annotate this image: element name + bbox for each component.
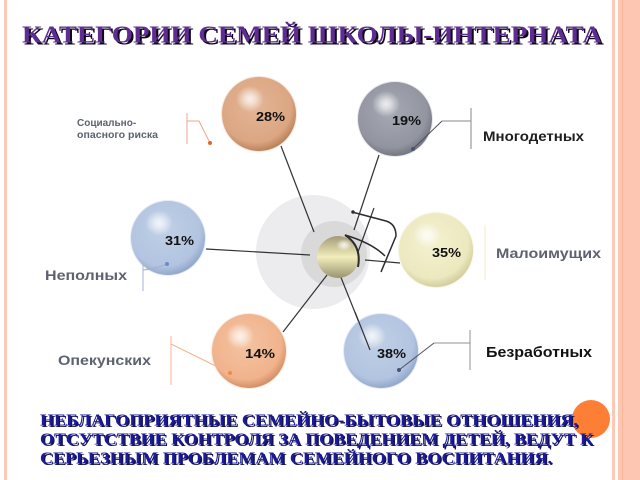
line into 38% sphere [355,312,370,350]
sphere: 38% [343,313,419,389]
callout: социально-опасного риска: опасного риска [77,130,158,141]
sphere: 28%: 28% [256,109,285,124]
conclusion text: НЕБЛАГОПРИЯТНЫЕ СЕМЕЙНО-БЫТОВЫЕ ОТНОШЕНИЯ, [42,412,580,431]
callout: опекунских: Опекунских [58,352,151,368]
callout: неполных: Неполных [45,267,127,283]
sphere: 31% [130,200,206,276]
sphere: 14% [211,313,287,389]
hand-drawn arrows [345,211,396,272]
left border stripe [4,0,7,480]
callout: многодетных: Многодетных [483,128,584,144]
diagram backdrop: grey circles [256,195,370,309]
conclusion text: ОТСУТСТВИЕ КОНТРОЛЯ ЗА ПОВЕДЕНИЕМ ДЕТЕЙ, ВЕДУТ К [40,430,594,448]
title: КАТЕГОРИИ СЕМЕЙ ШКОЛЫ-ИНТЕРНАТА [22,22,603,48]
sphere: 35% [398,212,474,288]
callout: неполных [45,262,169,291]
callout: многодетных [411,108,584,151]
sphere: 31%: 31% [165,233,194,248]
callout: безработных: Безработных [486,345,592,361]
right border stripes [612,0,640,480]
conclusion text: СЕРЬЕЗНЫМ ПРОБЛЕМАМ СЕМЕЙНОГО ВОСПИТАНИЯ. [40,448,552,468]
callout: социально-опасного риска: Социально- [77,118,136,129]
callout: социально-опасного риска [77,113,212,145]
callout: малоимущих: Малоимущих [496,245,601,261]
conclusion text: НЕБЛАГОПРИЯТНЫЕ СЕМЕЙНО-БЫТОВЫЕ ОТНОШЕНИЯ, [40,410,578,430]
conclusion text [40,410,595,469]
sphere: 35%: 35% [432,245,461,260]
sphere: 19% [357,81,433,157]
sphere: 19%: 19% [392,113,421,128]
conclusion text: ОТСУТСТВИЕ КОНТРОЛЯ ЗА ПОВЕДЕНИЕМ ДЕТЕЙ, ВЕДУТ К [42,431,595,450]
sphere: 14%: 14% [245,346,275,361]
callout: безработных [397,330,592,372]
connector lines [206,146,400,350]
sphere: 28% [221,76,297,152]
central sphere [317,236,359,278]
callout: опекунских [58,336,232,385]
conclusion text: СЕРЬЕЗНЫМ ПРОБЛЕМАМ СЕМЕЙНОГО ВОСПИТАНИЯ. [42,450,554,469]
sphere: 38%: 38% [377,346,406,361]
title: КАТЕГОРИИ СЕМЕЙ ШКОЛЫ-ИНТЕРНАТА [24,24,605,50]
callout: малоимущих [485,225,601,280]
orange accent circle [572,400,610,438]
